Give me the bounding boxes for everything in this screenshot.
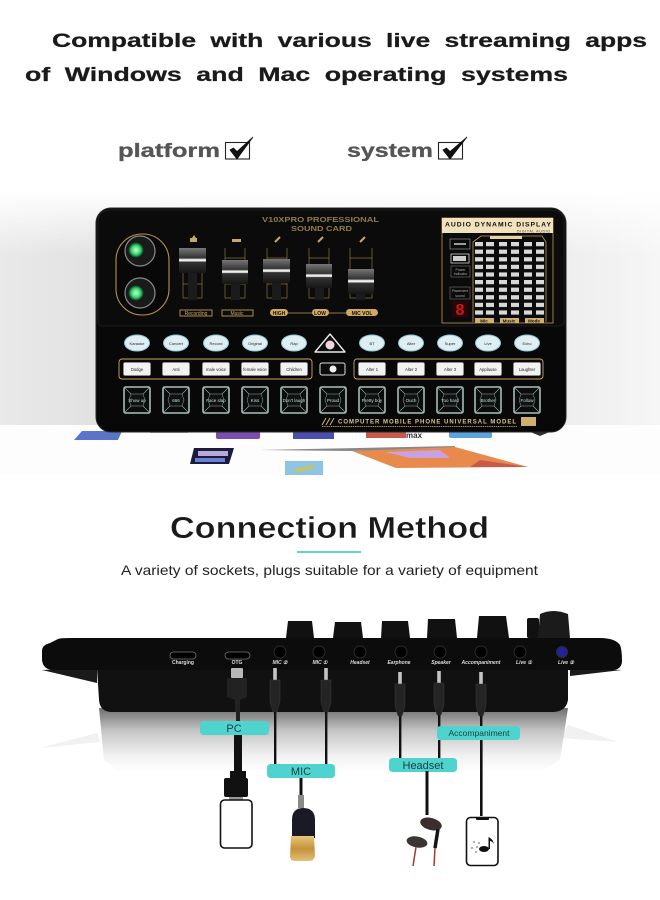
audio ports <box>274 646 568 658</box>
effect keys row: Dodge <box>131 367 144 372</box>
effect keys row: Applause <box>479 367 497 372</box>
effect keys row: Alter 3 <box>444 367 457 372</box>
slider labels <box>180 309 378 317</box>
label: accompaniment <box>437 726 520 740</box>
meter labels: Mic <box>480 318 488 324</box>
effect keys row <box>119 359 543 379</box>
effect keys row: Alter 2 <box>405 367 418 372</box>
meter labels: Music <box>503 318 516 324</box>
sound pad buttons row: Show up <box>128 398 146 403</box>
oval buttons row: Super <box>445 341 456 346</box>
port: otg <box>225 652 250 666</box>
model strip: COMPUTER MOBILE PHONE UNIVERSAL MODEL <box>338 420 516 426</box>
port: charging <box>170 652 196 666</box>
power indicators: Power <box>456 268 466 272</box>
port labels: Speaker <box>431 660 452 666</box>
port labels: Live ② <box>558 660 574 666</box>
sound pad buttons row: Follow <box>520 398 534 403</box>
meter labels: Mode <box>528 318 540 324</box>
sound pad buttons row: Brother <box>481 398 496 403</box>
effect keys row: female voice <box>243 367 267 372</box>
slider: low <box>306 237 332 300</box>
sound pad buttons row: Proud <box>327 398 339 403</box>
port labels <box>272 660 574 666</box>
slider: music <box>222 239 248 300</box>
title <box>25 31 647 86</box>
port labels: Accompaniment <box>461 660 501 666</box>
headset jacks and cables <box>395 671 444 759</box>
sound pad buttons row: Ouch <box>406 398 417 403</box>
port: charging: Charging <box>172 660 194 666</box>
title: of Windows and Mac operating systems <box>25 65 568 86</box>
sound pad buttons row: Pretty boy <box>362 398 383 403</box>
audio dynamic display <box>442 218 553 324</box>
oval buttons row: Concert <box>169 341 184 346</box>
model heading: SOUND CARD <box>291 224 353 233</box>
phone: music <box>466 817 498 866</box>
power indicators: indicator <box>454 272 468 276</box>
placement sound digit: 8 <box>456 302 465 319</box>
port labels: Headset <box>350 660 370 666</box>
slider: high <box>263 237 290 300</box>
port labels: Live ① <box>516 660 532 666</box>
platform check label <box>118 137 253 162</box>
oval buttons row <box>124 335 540 351</box>
slider labels: LOW <box>314 311 326 317</box>
slider: mic vol <box>348 237 374 300</box>
audio dynamic display: AUDIO DYNAMIC DISPLAY <box>445 222 551 228</box>
label: pc <box>200 721 269 735</box>
placement sound digit <box>450 287 470 319</box>
label: pc: PC <box>226 723 242 735</box>
power button <box>315 334 345 352</box>
product photo backdrop <box>0 190 660 475</box>
model heading: V10XPRO PROFESSIONAL <box>262 215 380 224</box>
port labels: Earphone <box>387 660 411 666</box>
oval buttons row: Echo <box>522 341 532 346</box>
sound pad buttons row: Too hard <box>441 398 459 403</box>
rear body <box>97 668 568 712</box>
meter bars <box>475 242 544 315</box>
effect keys row: Laughter <box>519 367 536 372</box>
effect keys row: Children <box>286 367 302 372</box>
model strip <box>322 417 536 426</box>
floor app icons: max <box>406 431 423 440</box>
label: headset <box>389 758 457 772</box>
sound pad buttons row <box>124 387 540 413</box>
oval buttons row: Alter <box>407 341 416 346</box>
label: accompaniment: Accompaniment <box>449 728 510 738</box>
label: headset: Headset <box>403 760 443 772</box>
sound pad buttons row: Kiss <box>251 398 260 403</box>
system check label <box>347 137 467 162</box>
earphones <box>406 771 443 866</box>
slider labels: Recording <box>185 311 208 317</box>
label: mic <box>267 764 335 778</box>
slider labels: HIGH <box>273 311 286 317</box>
placement sound digit: sound <box>455 294 465 298</box>
accompaniment jack and cable <box>476 672 486 816</box>
meter labels <box>475 318 544 324</box>
knob panel <box>116 234 169 315</box>
port: otg: OTG <box>232 660 243 666</box>
microphone <box>290 778 315 861</box>
model heading <box>262 215 380 233</box>
slider: recording <box>179 235 206 300</box>
slider labels: MIC VOL <box>352 311 372 317</box>
oval buttons row: Karaoke <box>130 341 145 346</box>
sound pad buttons row: Face slap <box>206 398 226 403</box>
sound pad buttons row: Don't laugh <box>283 398 306 403</box>
system check label: system <box>347 141 433 162</box>
section heading: Connection Method <box>170 511 489 545</box>
placement sound digit: Placement <box>452 289 468 293</box>
power indicators <box>450 239 470 277</box>
phone: pc connection <box>220 800 252 848</box>
sound card rear reflection <box>40 708 618 772</box>
effect keys row: male voice <box>206 367 227 372</box>
port labels: MIC ② <box>272 660 288 666</box>
meter frame <box>473 236 546 322</box>
effect keys row: Anti <box>172 367 180 372</box>
floor app icons <box>74 431 552 475</box>
top rail <box>42 638 622 670</box>
title: Compatible with various live streaming apps <box>52 31 647 52</box>
audio dynamic display: DIGITAL AUDIO <box>517 230 550 234</box>
port labels: MIC ① <box>312 660 328 666</box>
section subtitle: A variety of sockets, plugs suitable for a variety of equipment <box>121 562 538 578</box>
mic jacks and cables <box>270 668 331 765</box>
oval buttons row: Live <box>484 341 492 346</box>
oval buttons row: Rap <box>290 341 298 346</box>
heading underline <box>297 551 361 553</box>
upper panel outline <box>98 210 564 326</box>
oval buttons row: Record <box>210 341 222 346</box>
label: mic: MIC <box>291 766 311 778</box>
fader stubs and knobs <box>286 611 570 638</box>
usb cable to phone <box>224 668 248 801</box>
sound card front panel <box>96 208 566 432</box>
oval buttons row: Original <box>248 341 262 346</box>
effect keys row: Alter 1 <box>366 367 379 372</box>
platform check label: platform <box>118 141 220 162</box>
sound card rear view <box>42 611 622 712</box>
sound pad buttons row: 666 <box>172 398 180 403</box>
device body <box>96 208 566 432</box>
oval buttons row: BT <box>369 341 375 346</box>
slider labels: Music <box>230 311 244 317</box>
